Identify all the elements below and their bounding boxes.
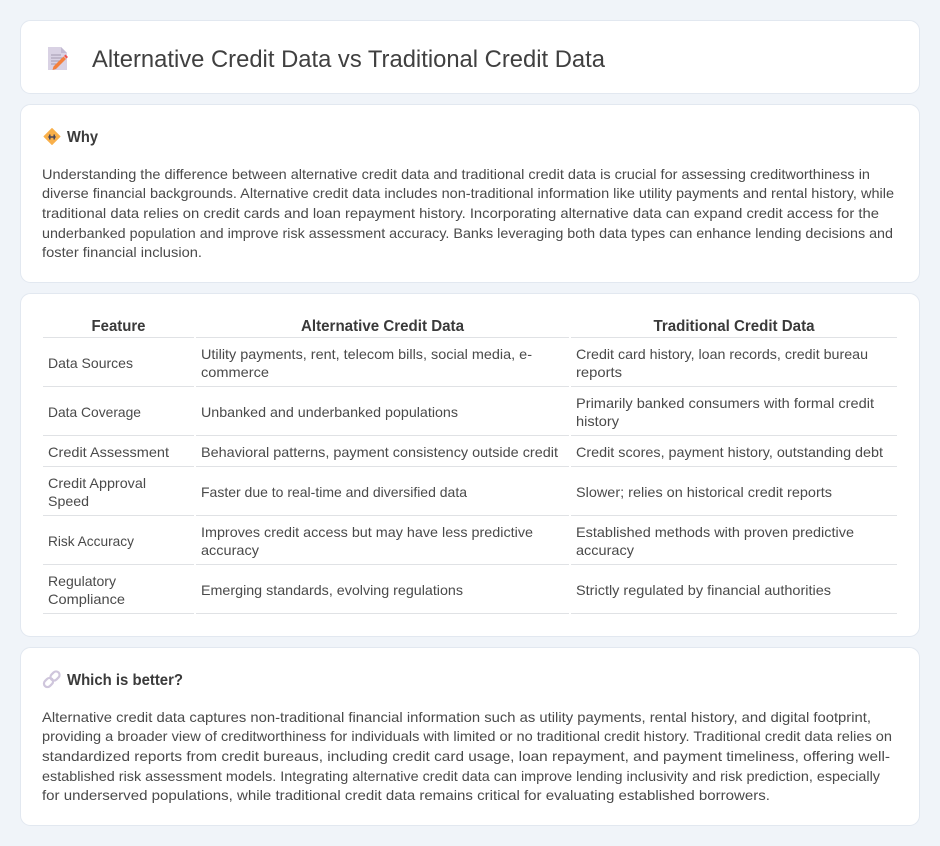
- text block: why: underbanked population and improve risk assessment accuracy. Banks leveraging both data types can enhance lending decisions and: [42, 225, 893, 241]
- table header: [92, 318, 815, 335]
- row: credit assessment: Credit scores, payment history, outstanding debt: [576, 444, 883, 460]
- table header: Feature: [92, 318, 146, 335]
- row: data coverage: history: [576, 413, 619, 429]
- text block: which is better: providing a broader view of creditworthiness for individuals with limited or no traditional credit history. Traditional credit data relies on: [42, 728, 892, 744]
- row: regulatory compliance: Strictly regulated by financial authorities: [576, 582, 831, 598]
- text block: why: traditional data relies on credit cards and loan repayment history. Incorporating alternative data can expand credit access for the: [42, 205, 879, 221]
- row: risk accuracy: accuracy: [576, 542, 634, 558]
- row: data sources: commerce: [201, 364, 269, 380]
- title: Alternative Credit Data vs Traditional Credit Data: [92, 46, 606, 73]
- panel: why: [20, 104, 920, 282]
- heading: why: Why: [67, 129, 98, 146]
- row: regulatory compliance: Regulatory: [48, 573, 116, 589]
- row: data coverage: Primarily banked consumers with formal credit: [576, 395, 874, 411]
- row: data sources: reports: [576, 364, 622, 380]
- row: credit assessment: [48, 444, 883, 460]
- row: credit approval speed: [48, 475, 832, 509]
- row: risk accuracy: accuracy: [201, 542, 259, 558]
- row: credit approval speed: Slower; relies on historical credit reports: [576, 484, 832, 500]
- row: risk accuracy: Established methods with proven predictive: [576, 524, 854, 540]
- row: regulatory compliance: Emerging standards, evolving regulations: [201, 582, 463, 598]
- text block: which is better: [42, 709, 892, 803]
- row: risk accuracy: Improves credit access but may have less predictive: [201, 524, 533, 540]
- text block: which is better: standardized reports from credit bureaus, including credit card usage, loan repayment, and payment timeliness, offering well-: [42, 748, 890, 764]
- row: data coverage: Data Coverage: [48, 404, 141, 420]
- row: data sources: [48, 346, 868, 380]
- row: credit assessment: Behavioral patterns, payment consistency outside credit: [201, 444, 558, 460]
- text block: which is better: Alternative credit data captures non-traditional financial information such as utility payments, rental history, and digital footprint,: [42, 709, 871, 725]
- text block: which is better: established risk assessment models. Integrating alternative credit data can improve lending inclusivity and risk prediction, especially: [42, 768, 880, 784]
- row: credit approval speed: Credit Approval: [48, 475, 146, 491]
- text block: which is better: for underserved populations, while traditional credit data remains critical for evaluating established borrowers.: [42, 787, 770, 803]
- row: regulatory compliance: [48, 573, 831, 607]
- row: risk accuracy: Risk Accuracy: [48, 533, 134, 549]
- table header: Traditional Credit Data: [654, 318, 815, 335]
- icon: document with pencil: [48, 47, 68, 70]
- table header: Alternative Credit Data: [301, 318, 464, 335]
- row: data coverage: [48, 395, 874, 429]
- row: risk accuracy: [48, 524, 854, 558]
- icon: warning diamond: [44, 128, 60, 144]
- text block: why: Understanding the difference between alternative credit data and traditional credit data is crucial for assessing creditworthiness in: [42, 166, 870, 182]
- panel: which is better: [20, 648, 920, 826]
- row: credit approval speed: Speed: [48, 493, 89, 509]
- panel: comparison table: [20, 294, 920, 636]
- row: regulatory compliance: Compliance: [48, 591, 125, 607]
- text block: why: foster financial inclusion.: [42, 244, 202, 260]
- row: data coverage: Unbanked and underbanked populations: [201, 404, 458, 420]
- row: data sources: Data Sources: [48, 355, 133, 371]
- heading: which is better: Which is better?: [67, 672, 183, 689]
- text block: why: diverse financial backgrounds. Alternative credit data includes non-traditional information like utility payments and rental history, while: [42, 185, 894, 201]
- icon: chain link: [42, 670, 61, 689]
- text block: why: [42, 166, 894, 260]
- row: credit assessment: Credit Assessment: [48, 444, 169, 460]
- row: data sources: Utility payments, rent, telecom bills, social media, e-: [201, 346, 532, 362]
- panel: title header: [20, 20, 920, 94]
- row: credit approval speed: Faster due to real-time and diversified data: [201, 484, 467, 500]
- row: data sources: Credit card history, loan records, credit bureau: [576, 346, 868, 362]
